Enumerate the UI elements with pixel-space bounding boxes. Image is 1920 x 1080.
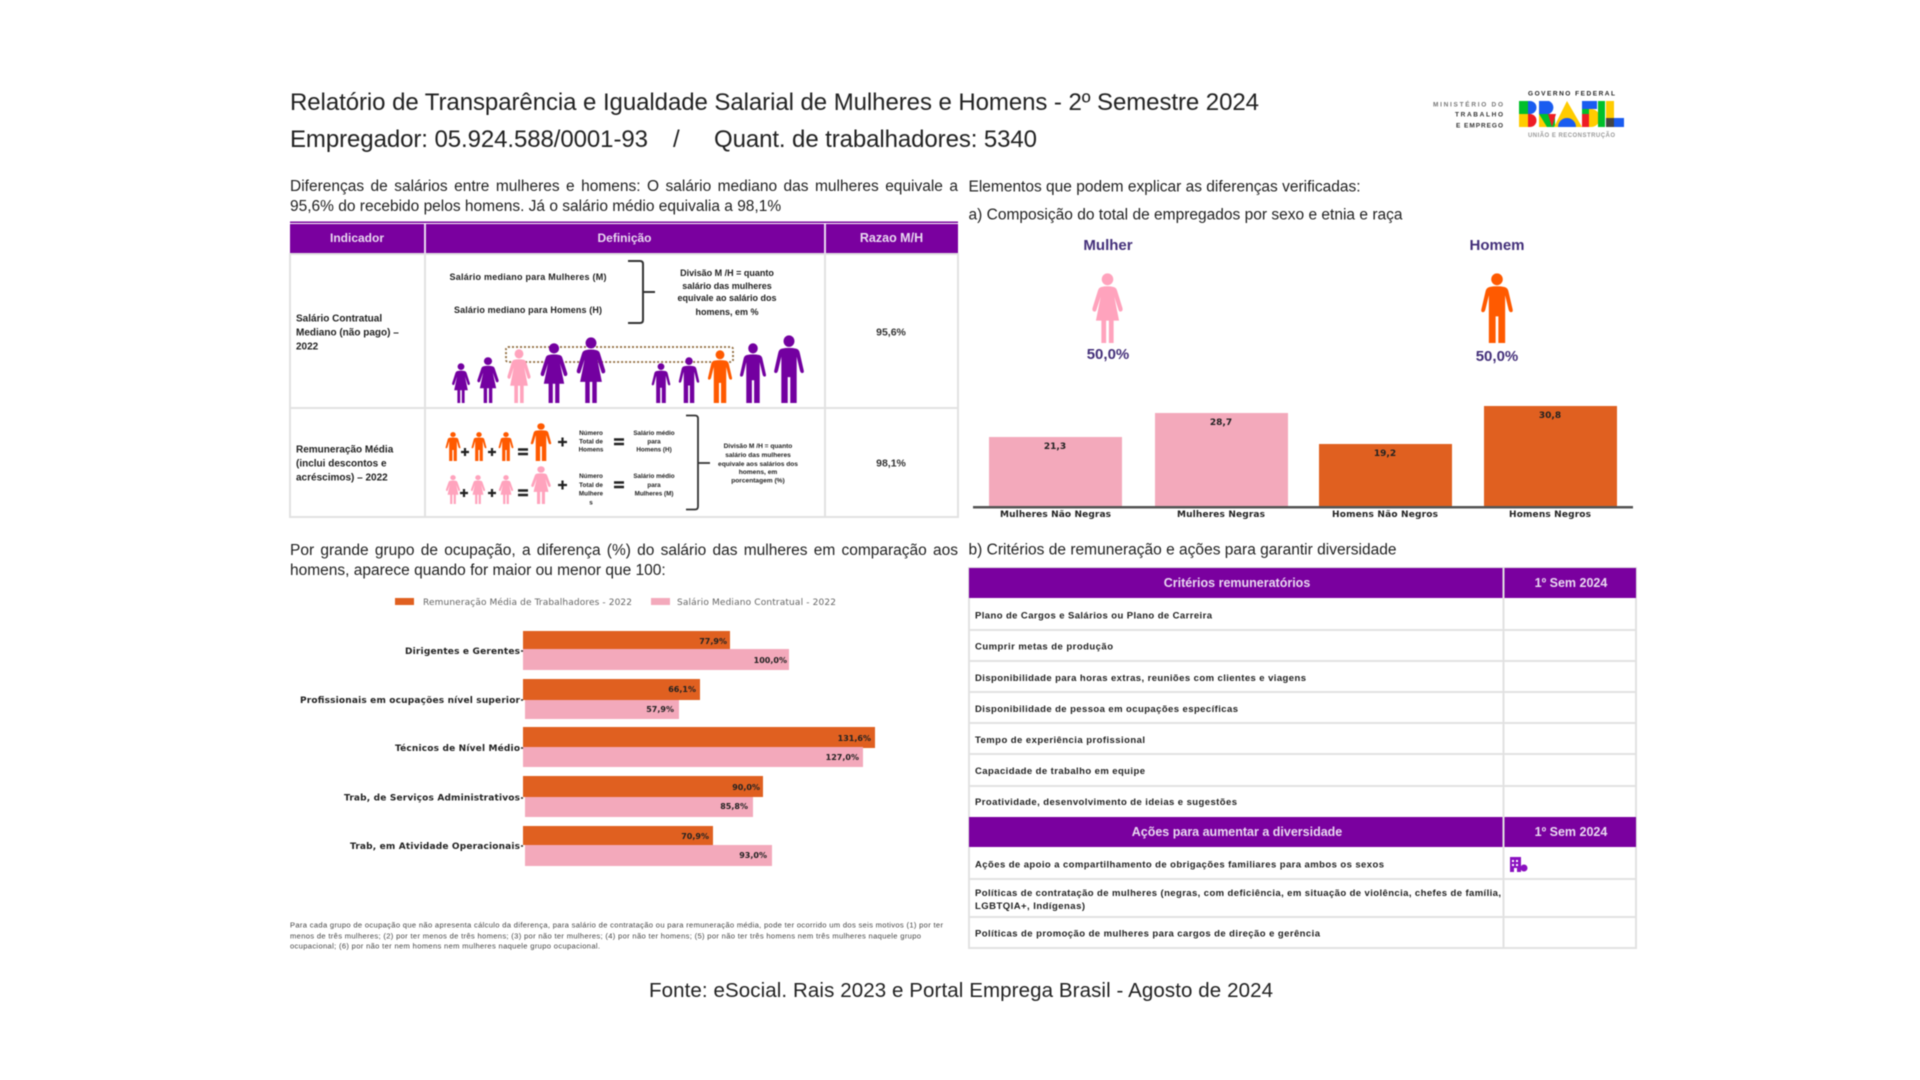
panel: woman share: Mulher	[1083, 237, 1133, 254]
column values	[1044, 411, 1561, 459]
row 1 median formula: equivale ao salário dos	[677, 293, 777, 303]
text block: salary differences: 95,6% do recebido pelos homens. Já o salário médio equivalia a 98,1%	[290, 198, 781, 214]
value labels	[646, 637, 871, 860]
chart legend	[395, 597, 836, 608]
row 2 women average formula: Salário médio	[633, 473, 675, 480]
row 2 men average formula: para	[647, 438, 661, 446]
diversity headers	[1132, 825, 1607, 839]
column bars	[973, 406, 1633, 508]
title: Relatório de Transparência e Igualdade Salarial de Mulheres e Homens - 2º Semestre 2024	[290, 89, 1259, 116]
row 1 indicator	[296, 314, 399, 352]
bars	[523, 631, 875, 866]
column values: 19,2	[1374, 449, 1396, 459]
criteria rows: Disponibilidade de pessoa em ocupações específicas	[975, 704, 1238, 715]
government tagline: UNIÃO E RECONSTRUÇÃO	[1528, 132, 1615, 139]
category labels	[300, 647, 523, 852]
column values: 28,7	[1210, 418, 1232, 428]
column values: 21,3	[1044, 442, 1066, 452]
row 2 women average formula: s	[589, 500, 593, 506]
row 2 men average formula: Homens (H)	[636, 446, 672, 454]
row 2 men average formula: Total de	[579, 438, 603, 446]
criteria headers: 1º Sem 2024	[1535, 576, 1607, 590]
row 2 indicator: Remuneração Média	[296, 444, 394, 456]
value labels: 93,0%	[739, 851, 767, 860]
chart: composition by sex and race	[973, 406, 1633, 520]
table headers: Razao M/H	[860, 231, 923, 245]
column values: 30,8	[1539, 411, 1561, 421]
employer line: /	[673, 126, 680, 153]
heading: composition: a) Composição do total de empregados por sexo e etnia e raça	[968, 206, 1403, 224]
row 1 ratio: 95,6%	[876, 326, 907, 338]
category labels: Dirigentes e Gerentes	[405, 647, 520, 657]
panel: woman share	[1083, 237, 1133, 363]
value labels: 70,9%	[681, 832, 709, 841]
footnote: menos de três mulheres; (2) por ter menos de três homens; (3) por não ter mulheres; (4) por não ter homens; (5) por não ter três homens nem três mulheres naquele grupo	[290, 932, 921, 940]
row 1 indicator: 2022	[296, 342, 319, 352]
row 2 indicator: acréscimos) – 2022	[296, 472, 388, 484]
text block: occupation comparison: Por grande grupo de ocupação, a diferença (%) do salário das mulheres em comparação aos	[290, 542, 958, 559]
criteria rows	[975, 610, 1306, 808]
column labels: Mulheres Negras	[1177, 510, 1265, 520]
chart: occupation salary comparison	[300, 597, 875, 866]
text block: salary differences: Diferenças de salários entre mulheres e homens: O salário mediano das mulheres equivale a	[290, 178, 958, 195]
panel: man share	[1469, 237, 1525, 365]
column labels	[1000, 510, 1591, 520]
row 1 median formula: salário das mulheres	[682, 281, 772, 291]
ministry name: TRABALHO	[1455, 112, 1503, 118]
value labels: 127,0%	[826, 753, 859, 762]
Brasil colored wordmark	[1519, 101, 1624, 127]
source: Fonte: eSocial. Rais 2023 e Portal Emprega Brasil - Agosto de 2024	[649, 979, 1273, 1002]
row 2 division text: Divisão M /H = quanto	[724, 443, 792, 450]
row 1 bracket	[628, 261, 655, 323]
value labels: 57,9%	[646, 705, 674, 714]
employer line: Empregador: 05.924.588/0001-93	[290, 126, 648, 153]
ministry name: E EMPREGO	[1456, 122, 1503, 130]
chart legend: Remuneração Média de Trabalhadores - 2022	[423, 597, 632, 608]
value labels: 131,6%	[838, 734, 871, 743]
criteria rows: Tempo de experiência profissional	[975, 735, 1145, 746]
row 2 women average formula: Mulheres (M)	[635, 490, 673, 498]
man percentage: 50,0%	[1476, 348, 1518, 365]
panel: man share: Homem	[1469, 237, 1525, 254]
icon: man	[1481, 273, 1513, 343]
row 2 division text: salário das mulheres	[725, 452, 791, 459]
value labels: 77,9%	[699, 637, 727, 646]
value labels: 85,8%	[720, 802, 748, 811]
row 1 median formula: Salário mediano para Mulheres (M)	[450, 272, 606, 282]
icons: women ordered by salary	[452, 337, 605, 403]
row 2 women average formula: para	[647, 482, 661, 489]
row 1 median formula: homens, em %	[695, 307, 759, 317]
column labels: Homens Negros	[1509, 510, 1591, 520]
row 2 ratio: 98,1%	[876, 458, 907, 470]
column labels: Mulheres Não Negras	[1000, 510, 1111, 520]
panel: indicator definition table	[290, 222, 958, 517]
row 1 indicator: Salário Contratual	[296, 314, 382, 324]
row 2 bracket	[686, 416, 710, 510]
criteria headers: Critérios remuneratórios	[1164, 576, 1310, 590]
value labels: 100,0%	[754, 656, 787, 665]
row 2 men average formula	[446, 423, 675, 461]
diversity rows: Políticas de contratação de mulheres (negras, com deficiência, em situação de violência, chefes de família,	[975, 888, 1501, 899]
criteria rows: Capacidade de trabalho em equipe	[975, 766, 1145, 777]
woman percentage: 50,0%	[1087, 346, 1129, 363]
category labels: Técnicos de Nível Médio	[395, 743, 520, 754]
row 1 median formula: Salário mediano para Homens (H)	[454, 305, 602, 315]
row 1 dotted median highlight	[506, 347, 733, 362]
text block: occupation comparison	[290, 542, 958, 580]
row 2 men average formula: Número	[579, 430, 603, 437]
icons: men ordered by salary	[652, 335, 804, 403]
table headers: Indicador	[330, 231, 384, 245]
row 2 division text: equivale aos salários dos	[718, 461, 798, 468]
value labels: 90,0%	[732, 783, 760, 792]
icon: company building with check	[1510, 857, 1528, 872]
text block: salary differences	[290, 178, 959, 216]
logo: ministry and Governo Federal Brasil	[1433, 90, 1624, 139]
row 2 division text: homens, em	[739, 469, 777, 476]
criteria headers	[1164, 576, 1607, 590]
table headers	[330, 231, 923, 245]
row 2 indicator: (inclui descontos e	[296, 458, 387, 470]
heading: criteria: b) Critérios de remuneração e ações para garantir diversidade	[968, 542, 1396, 558]
diversity rows: Ações de apoio a compartilhamento de obrigações familiares para ambos os sexos	[975, 860, 1384, 870]
row 1 median formula: Divisão M /H = quanto	[680, 268, 774, 278]
row 2 women average formula: Total de	[579, 482, 603, 489]
row 2 women average formula	[446, 466, 675, 506]
row 1 median formula	[450, 268, 777, 317]
row 2 women average formula: Mulhere	[579, 490, 604, 498]
row 2 division text: porcentagem (%)	[731, 478, 785, 484]
diversity headers: Ações para aumentar a diversidade	[1132, 825, 1342, 839]
footnote: ocupacional; (6) por não ter nem homens nem mulheres naquele grupo ocupacional.	[290, 942, 600, 950]
chart legend: Salário Mediano Contratual - 2022	[677, 598, 836, 608]
government label: GOVERNO FEDERAL	[1528, 90, 1615, 98]
criteria rows: Disponibilidade para horas extras, reuniões com clientes e viagens	[975, 673, 1306, 684]
column labels: Homens Não Negros	[1332, 510, 1438, 520]
diversity rows: Políticas de promoção de mulheres para cargos de direção e gerência	[975, 928, 1321, 940]
category labels: Trab, de Serviços Administrativos	[344, 794, 520, 804]
right heading: explanatory elements: Elementos que podem explicar as diferenças verificadas:	[968, 178, 1360, 196]
value labels: 66,1%	[668, 685, 696, 694]
row 2 division text	[718, 443, 798, 484]
table headers: Definição	[597, 231, 652, 245]
text block: occupation comparison: homens, aparece quando for maior ou menor que 100:	[290, 562, 666, 578]
criteria rows: Proatividade, desenvolvimento de ideias e sugestões	[975, 797, 1237, 808]
icon: woman	[1092, 273, 1123, 343]
diversity rows	[975, 860, 1501, 940]
diversity rows: LGBTQIA+, Indígenas)	[975, 901, 1085, 912]
row 2 women average formula: Número	[579, 473, 603, 480]
criteria rows: Cumprir metas de produção	[975, 642, 1113, 652]
employer line	[290, 126, 1037, 153]
diversity headers: 1º Sem 2024	[1535, 825, 1607, 839]
panel: criteria and diversity table	[969, 568, 1636, 948]
footnote: Para cada grupo de ocupação que não apresenta cálculo da diferença, para salário de contratação ou para remuneração média, pode ter ocorrido um dos seis motivos (1) por ter	[290, 920, 943, 930]
row 2 men average formula: Salário médio	[633, 430, 675, 437]
category labels: Trab, em Atividade Operacionais	[350, 842, 520, 852]
row 2 men average formula: Homens	[579, 446, 604, 454]
row 2 indicator	[296, 444, 394, 484]
criteria rows: Plano de Cargos e Salários ou Plano de Carreira	[975, 610, 1213, 622]
ministry name: MINISTÉRIO DO	[1433, 100, 1503, 108]
employer line: Quant. de trabalhadores: 5340	[714, 126, 1037, 153]
row 1 indicator: Mediano (não pago) –	[296, 328, 399, 338]
title	[290, 89, 1259, 153]
ministry name	[1433, 100, 1503, 130]
category labels: Profissionais em ocupações nível superior	[300, 696, 521, 706]
footnote	[290, 920, 943, 950]
